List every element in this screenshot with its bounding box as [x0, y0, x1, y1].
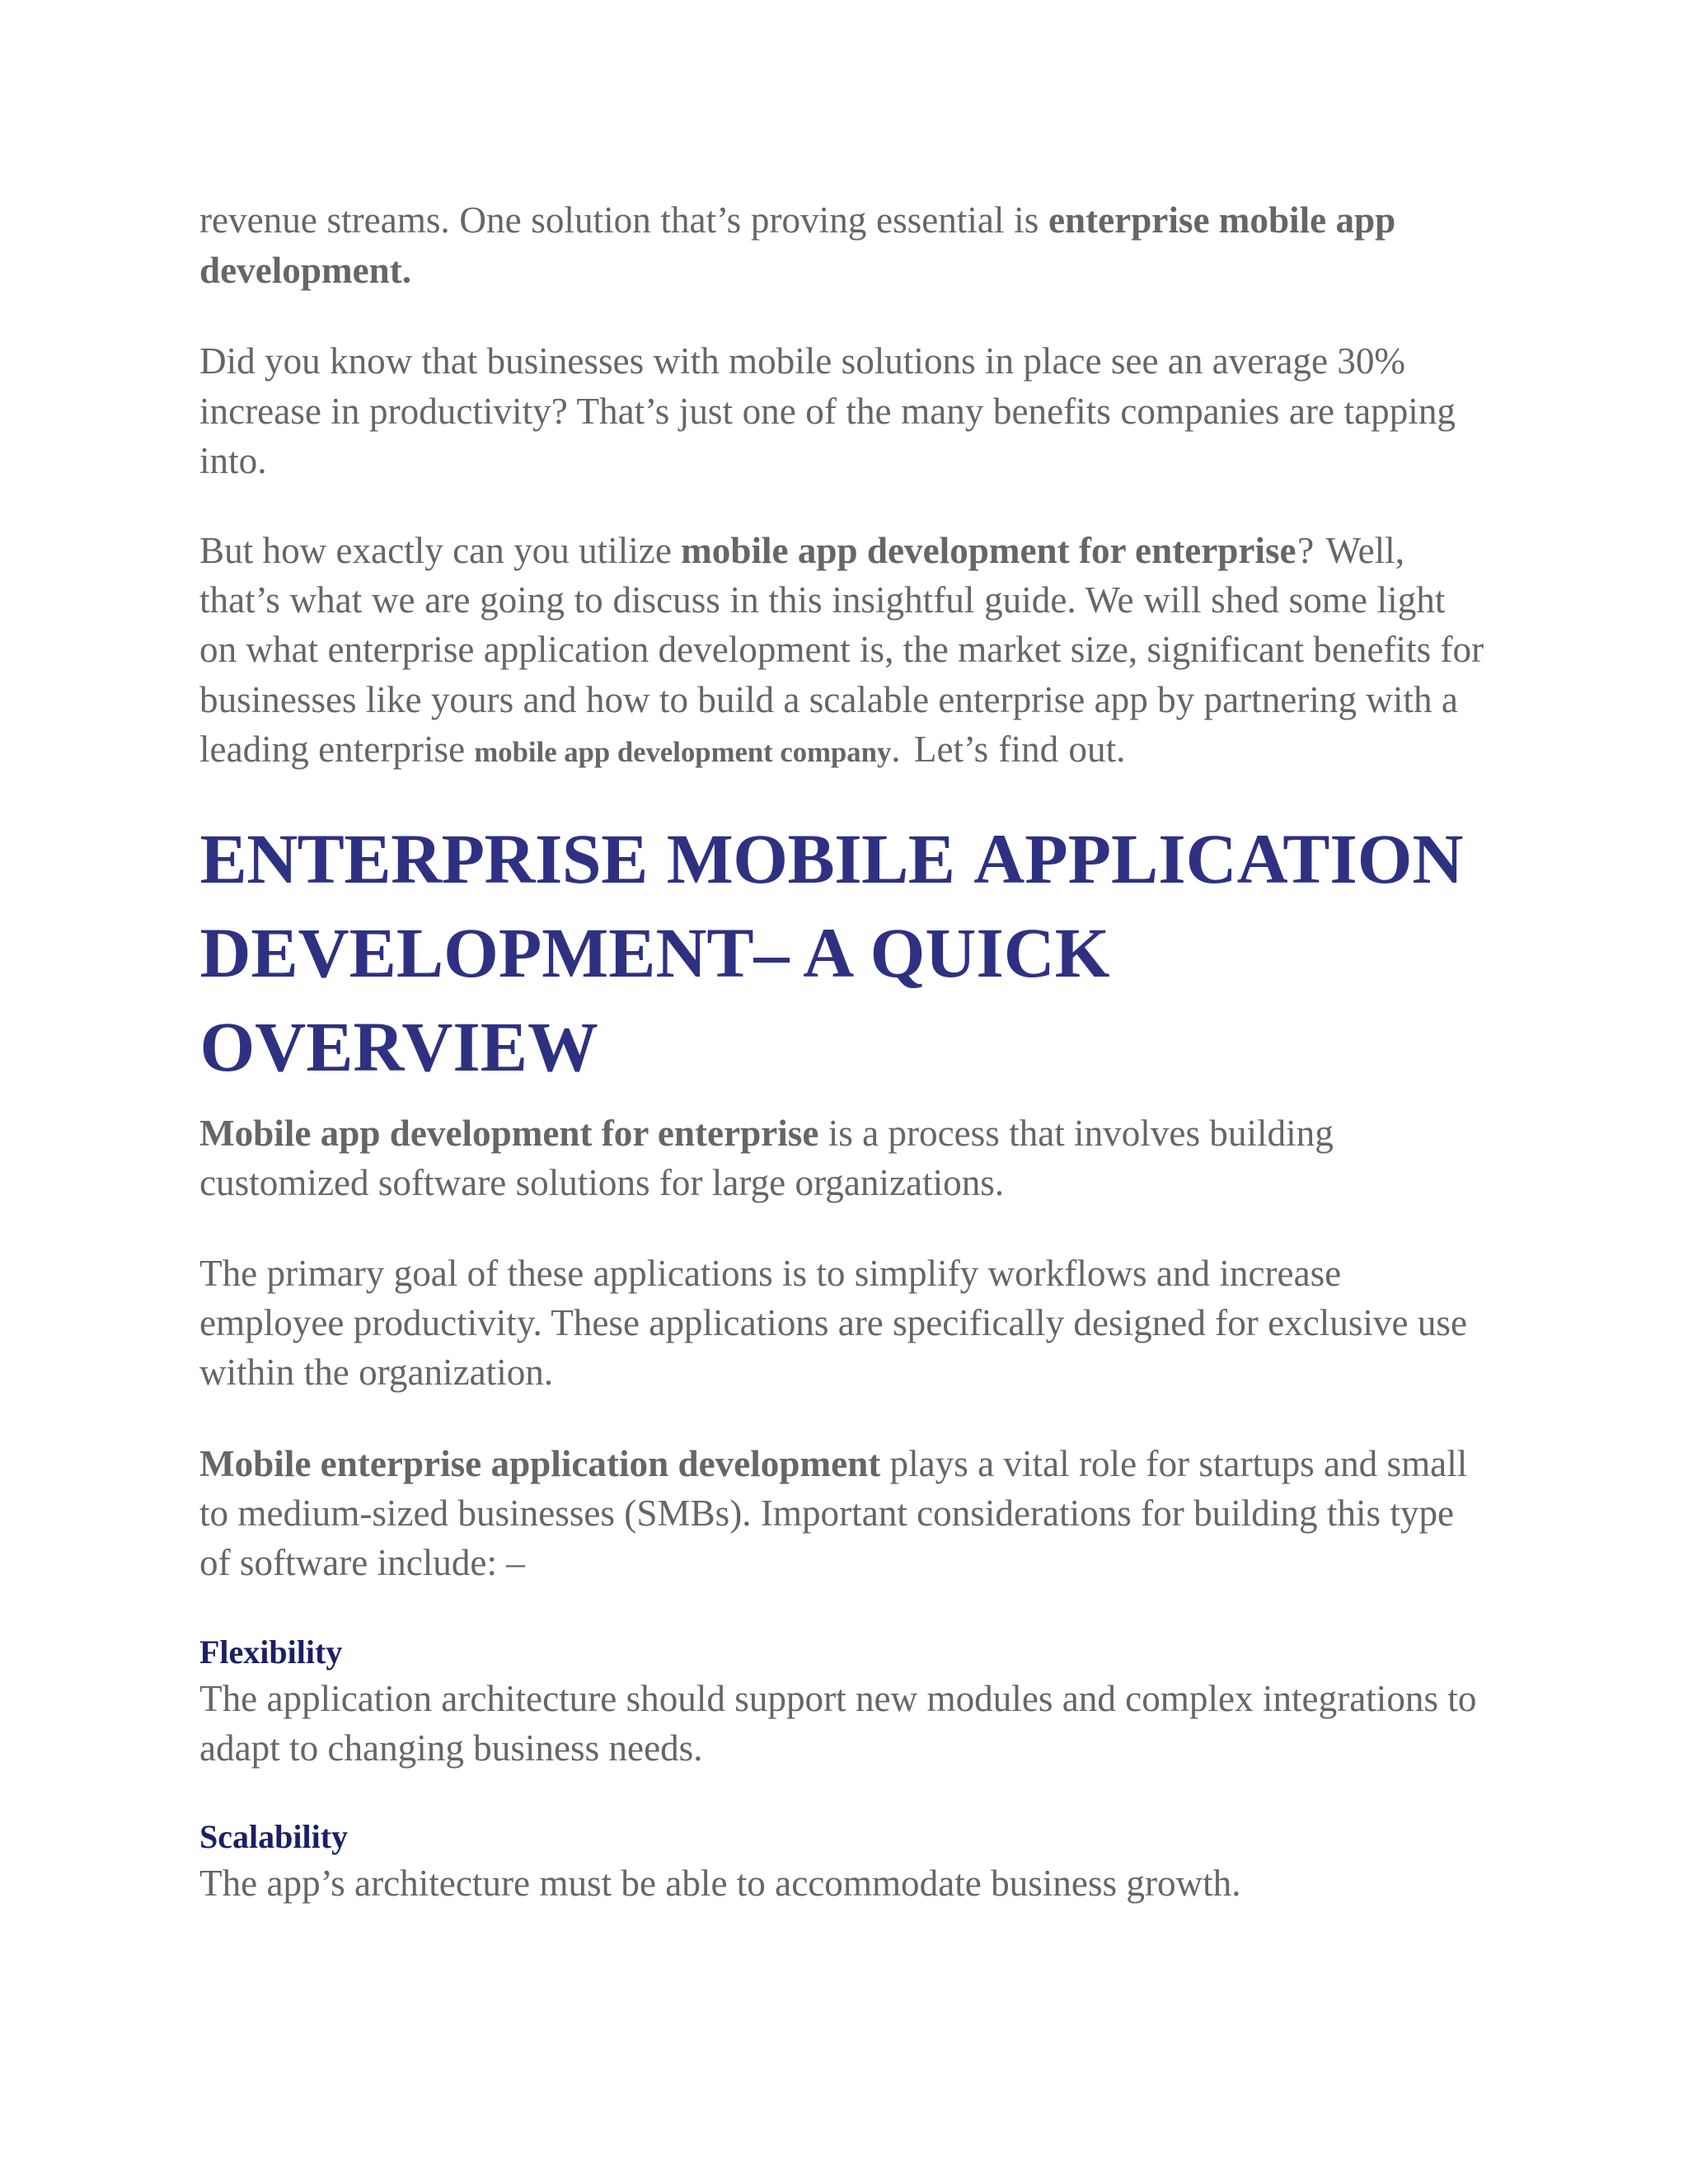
text block: flexibility description	[199, 1678, 1476, 1769]
text block: productivity statistic: Did you know that businesses with mobile solutions in place see an average 30%	[199, 340, 1405, 382]
text block: primary goal: employee productivity. These applications are specifically designed for exclusive use	[199, 1302, 1467, 1343]
text block: considerations intro	[199, 1443, 1467, 1583]
text block: definition: customized software solutions for large organizations.	[199, 1162, 1004, 1203]
text block: guide introduction	[199, 530, 1484, 770]
text block: guide introduction: leading enterprise mobile app development company. Let’s find out.	[199, 729, 1125, 770]
heading: enterprise mobile application development overview: ENTERPRISE MOBILE APPLICATION	[199, 820, 1464, 898]
text block: primary goal: The primary goal of these applications is to simplify workflows and increase	[199, 1253, 1341, 1294]
text block: primary goal: within the organization.	[199, 1352, 553, 1393]
text block: guide introduction: that’s what we are going to discuss in this insightful guide. We will shed some light	[199, 579, 1445, 621]
text block: productivity statistic: increase in productivity? That’s just one of the many benefits companies are tapping	[199, 391, 1456, 432]
subheading: scalability: Scalability	[199, 1818, 348, 1855]
heading: enterprise mobile application development overview: DEVELOPMENT– A QUICK	[199, 914, 1109, 992]
heading: enterprise mobile application development overview	[199, 820, 1464, 1086]
text block: guide introduction: businesses like yours and how to build a scalable enterprise app by partnering with a	[199, 679, 1458, 720]
text block: considerations intro: Mobile enterprise application development plays a vital role for startups and small	[199, 1443, 1467, 1484]
text block: guide introduction: on what enterprise application development is, the market size, significant benefits for	[199, 629, 1484, 670]
text block: intro continuation: revenue streams. One solution that’s proving essential is enterprise mobile app	[199, 199, 1395, 241]
text block: productivity statistic: into.	[199, 440, 267, 481]
text block: guide introduction: But how exactly can you utilize mobile app development for enterprise? Well,	[199, 530, 1404, 571]
text block: considerations intro: of software include: –	[199, 1542, 525, 1583]
text block: primary goal	[199, 1253, 1467, 1393]
text block: considerations intro: to medium-sized businesses (SMBs). Important considerations for building this type	[199, 1493, 1454, 1534]
subheading: flexibility: Flexibility	[199, 1633, 342, 1671]
text block: definition	[199, 1113, 1334, 1203]
heading: enterprise mobile application development overview: OVERVIEW	[199, 1008, 598, 1086]
text block: definition: Mobile app development for enterprise is a process that involves building	[199, 1113, 1334, 1154]
text block: flexibility description: adapt to changing business needs.	[199, 1727, 703, 1769]
text block: scalability description: The app’s architecture must be able to accommodate business growth.	[199, 1863, 1241, 1904]
text block: flexibility description: The application architecture should support new modules and complex integrations to	[199, 1678, 1476, 1719]
text block: intro continuation	[199, 199, 1395, 291]
text block: productivity statistic	[199, 340, 1456, 481]
text block: intro continuation: development.	[199, 250, 411, 291]
